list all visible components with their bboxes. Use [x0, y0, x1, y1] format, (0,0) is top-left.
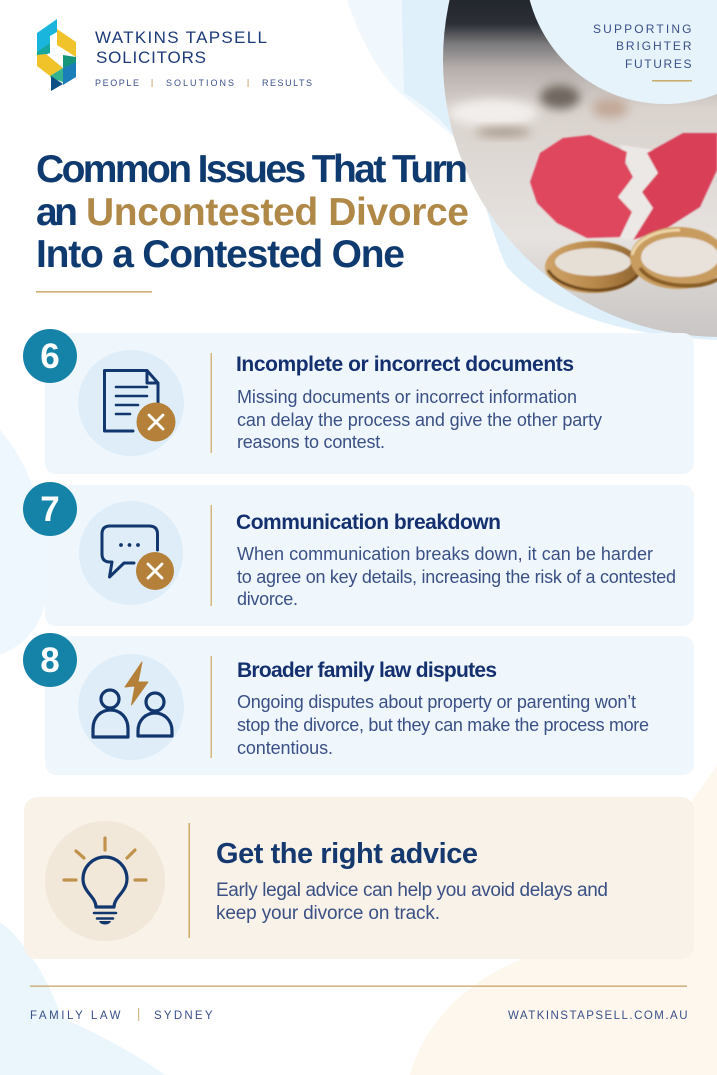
item 6 description: Missing documents or incorrect information	[237, 387, 577, 407]
logo	[37, 19, 312, 91]
item 7 description: to agree on key details, increasing the risk of a contested	[237, 567, 676, 587]
advice description	[216, 880, 608, 924]
item 8 description: contentious.	[237, 738, 333, 758]
advice description: keep your divorce on track.	[216, 903, 440, 924]
tagline	[593, 22, 692, 71]
number 8: 8	[40, 641, 60, 680]
item 7 description: divorce.	[237, 589, 298, 609]
number 6	[23, 329, 77, 383]
footer website: WATKINSTAPSELL.COM.AU	[508, 1010, 688, 1022]
logo name: WATKINS TAPSELL	[95, 28, 267, 47]
logo strapline: RESULTS	[262, 78, 312, 88]
item 6 description	[237, 387, 602, 452]
title: Into a Contested One	[36, 233, 405, 276]
title: an	[36, 191, 78, 234]
panel: item 7	[23, 482, 694, 626]
title: Common Issues That Turn	[36, 148, 468, 191]
number 6: 6	[40, 337, 60, 376]
wedding rings	[545, 227, 717, 293]
panel: item 8	[23, 633, 694, 775]
footer left: FAMILY LAW	[30, 1010, 121, 1022]
item 8 description: Ongoing disputes about property or parenting won’t	[237, 692, 636, 712]
panel: item 7: Communication breakdown	[236, 511, 501, 534]
top-right tagline badge	[525, 0, 717, 104]
panel: item 6	[23, 329, 694, 474]
logo strapline	[95, 78, 312, 88]
icon: lightbulb	[45, 821, 165, 941]
number 7	[23, 482, 77, 536]
number 8	[23, 633, 77, 687]
icon: speech bubble with cross	[79, 501, 183, 605]
title	[36, 148, 469, 276]
logo strapline: SOLUTIONS	[166, 78, 234, 88]
logo name	[95, 28, 267, 67]
footer left	[30, 1008, 213, 1022]
panel: get the right advice: Get the right advice	[216, 838, 478, 870]
footer left: SYDNEY	[154, 1010, 213, 1022]
photo: broken heart and wedding rings	[440, 0, 717, 340]
item 6 description: can delay the process and give the other party	[237, 410, 602, 430]
icon: document with cross	[78, 350, 184, 456]
tagline: FUTURES	[625, 57, 692, 71]
advice description: Early legal advice can help you avoid delays and	[216, 880, 608, 901]
tagline: SUPPORTING	[593, 22, 692, 36]
icon: two people with lightning	[78, 654, 184, 760]
panel: item 6: Incomplete or incorrect documents	[236, 353, 574, 376]
logo strapline: PEOPLE	[95, 78, 139, 88]
item 7 description	[237, 544, 676, 609]
panel: item 8: Broader family law disputes	[237, 659, 497, 682]
item 8 description	[237, 692, 649, 758]
item 8 description: stop the divorce, but they can make the process more	[237, 715, 649, 735]
title: Uncontested Divorce	[86, 191, 469, 234]
panel: get the right advice	[24, 797, 694, 959]
tagline: BRIGHTER	[616, 39, 692, 53]
number 7: 7	[40, 490, 60, 529]
item 6 description: reasons to contest.	[237, 432, 385, 452]
logo name: SOLICITORS	[96, 48, 206, 67]
item 7 description: When communication breaks down, it can be harder	[237, 544, 653, 564]
broken heart	[530, 133, 717, 240]
logo mark	[37, 19, 76, 91]
